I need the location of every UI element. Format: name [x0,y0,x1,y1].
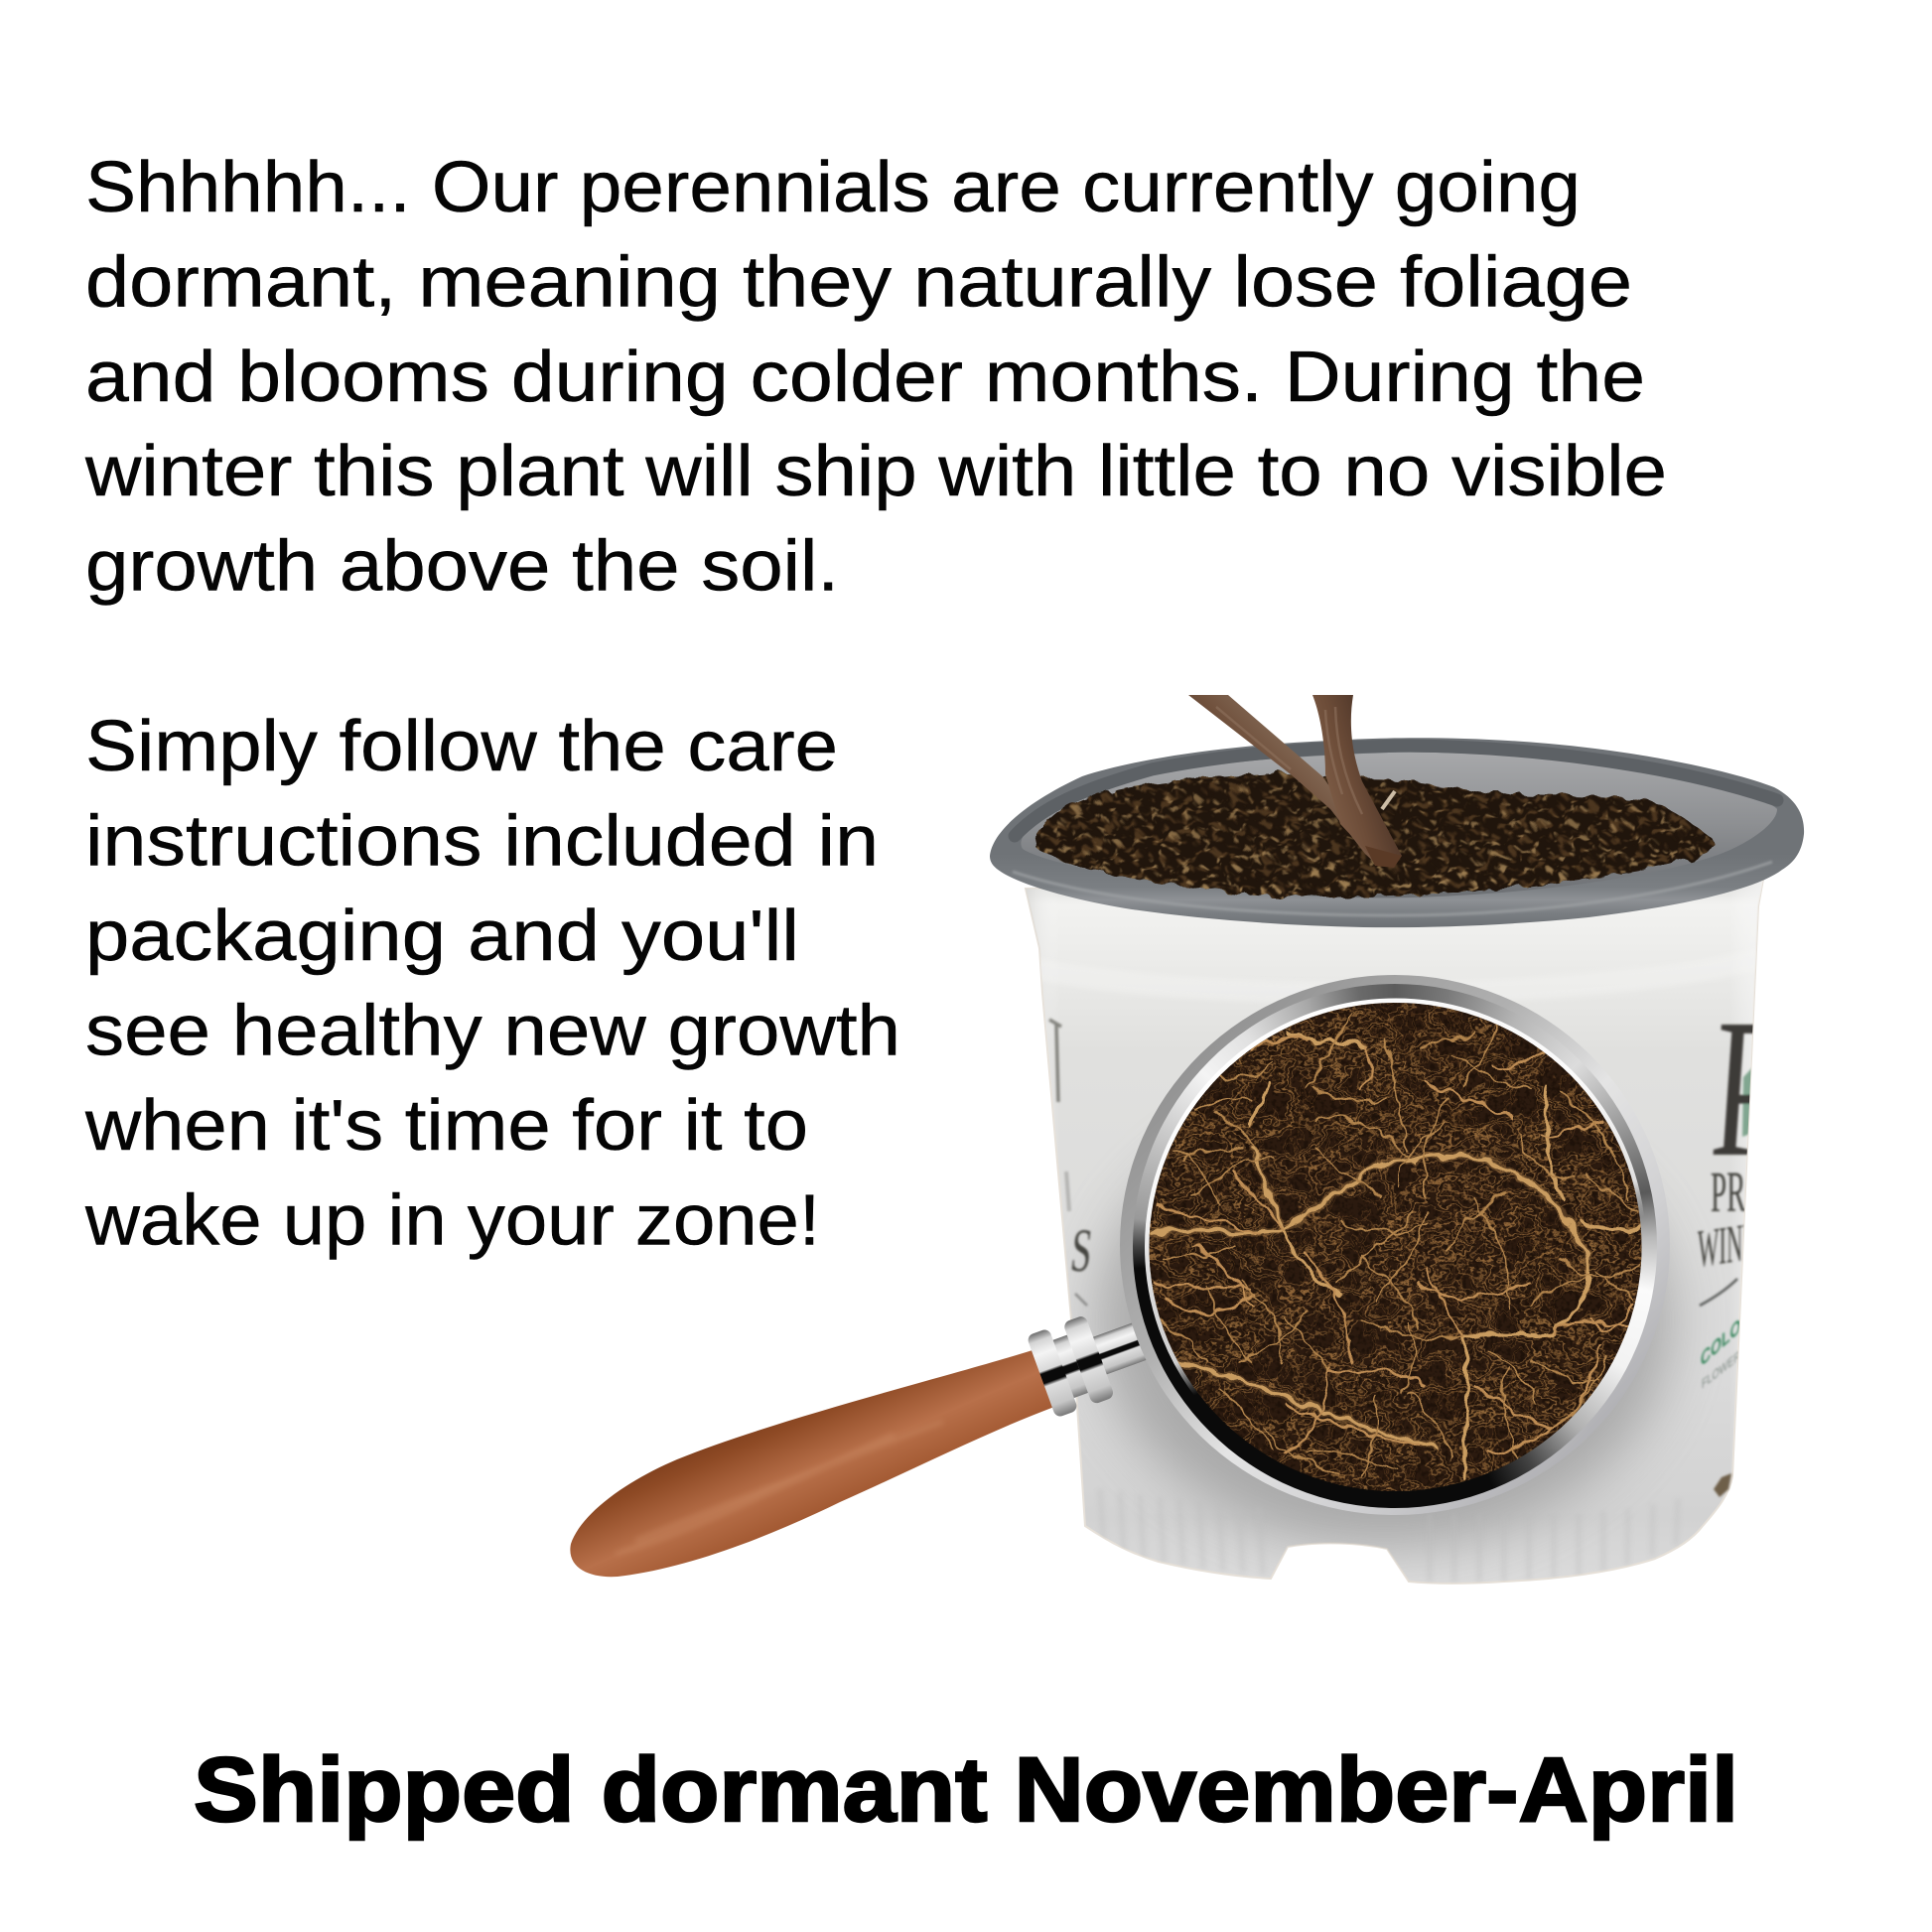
footer heading: Shipped dormant November-April [194,1739,1738,1841]
pot label: left lettering [1049,1020,1095,1306]
text block: dormancy intro: winter this plant will ship with little to no visible [84,432,1667,511]
rim back dark band [1015,746,1777,836]
pot inner wall [1021,753,1777,897]
pot label: right brand lettering: FLOWERS [1702,1342,1746,1392]
pot label: left lettering: S [1067,1217,1095,1285]
pot rim [990,738,1804,927]
text block: care instructions: instructions included in [85,802,879,882]
pot label: right brand lettering: WINNERS [1698,1204,1800,1279]
text block: dormancy intro: growth above the soil. [85,526,839,606]
text block: care instructions: wake up in your zone! [84,1181,820,1261]
text block: dormancy intro: Shhhhh... Our perennials are currently going [85,148,1581,227]
pot body [1023,874,1826,1588]
text block: care instructions: Simply follow the care [85,707,838,786]
dirt at pot base [1714,1473,1731,1497]
pot label: right brand lettering: COLOR [1701,1305,1750,1372]
text block: care instructions: see healthy new growth [85,991,900,1070]
lens view: roots and soil [1142,993,1648,1499]
rim highlight [1013,862,1772,915]
text block: dormancy intro: dormant, meaning they naturally lose foliage [85,242,1632,322]
notch shadow under pot [1269,1548,1408,1585]
magnifier lens frame [1120,975,1670,1515]
magnifier ferrule [1027,1296,1167,1418]
plant stems [1188,695,1402,868]
illustration: potted plant [990,695,1826,1588]
soil [1035,769,1716,899]
text block: dormancy intro [84,148,1667,606]
pot label: right brand lettering: PROVEN [1711,1160,1826,1224]
magnifier handle [570,1350,1054,1577]
pot label: right brand lettering: P [1706,977,1793,1198]
icon: magnifying glass over roots [570,975,1670,1577]
text block: dormancy intro: and blooms during colder months. During the [85,338,1645,417]
text block: care instructions [84,707,900,1261]
pot label: right brand lettering [1696,1023,1753,1388]
text block: care instructions: packaging and you'll [85,897,799,976]
text block: care instructions: when it's time for it to [84,1086,808,1166]
